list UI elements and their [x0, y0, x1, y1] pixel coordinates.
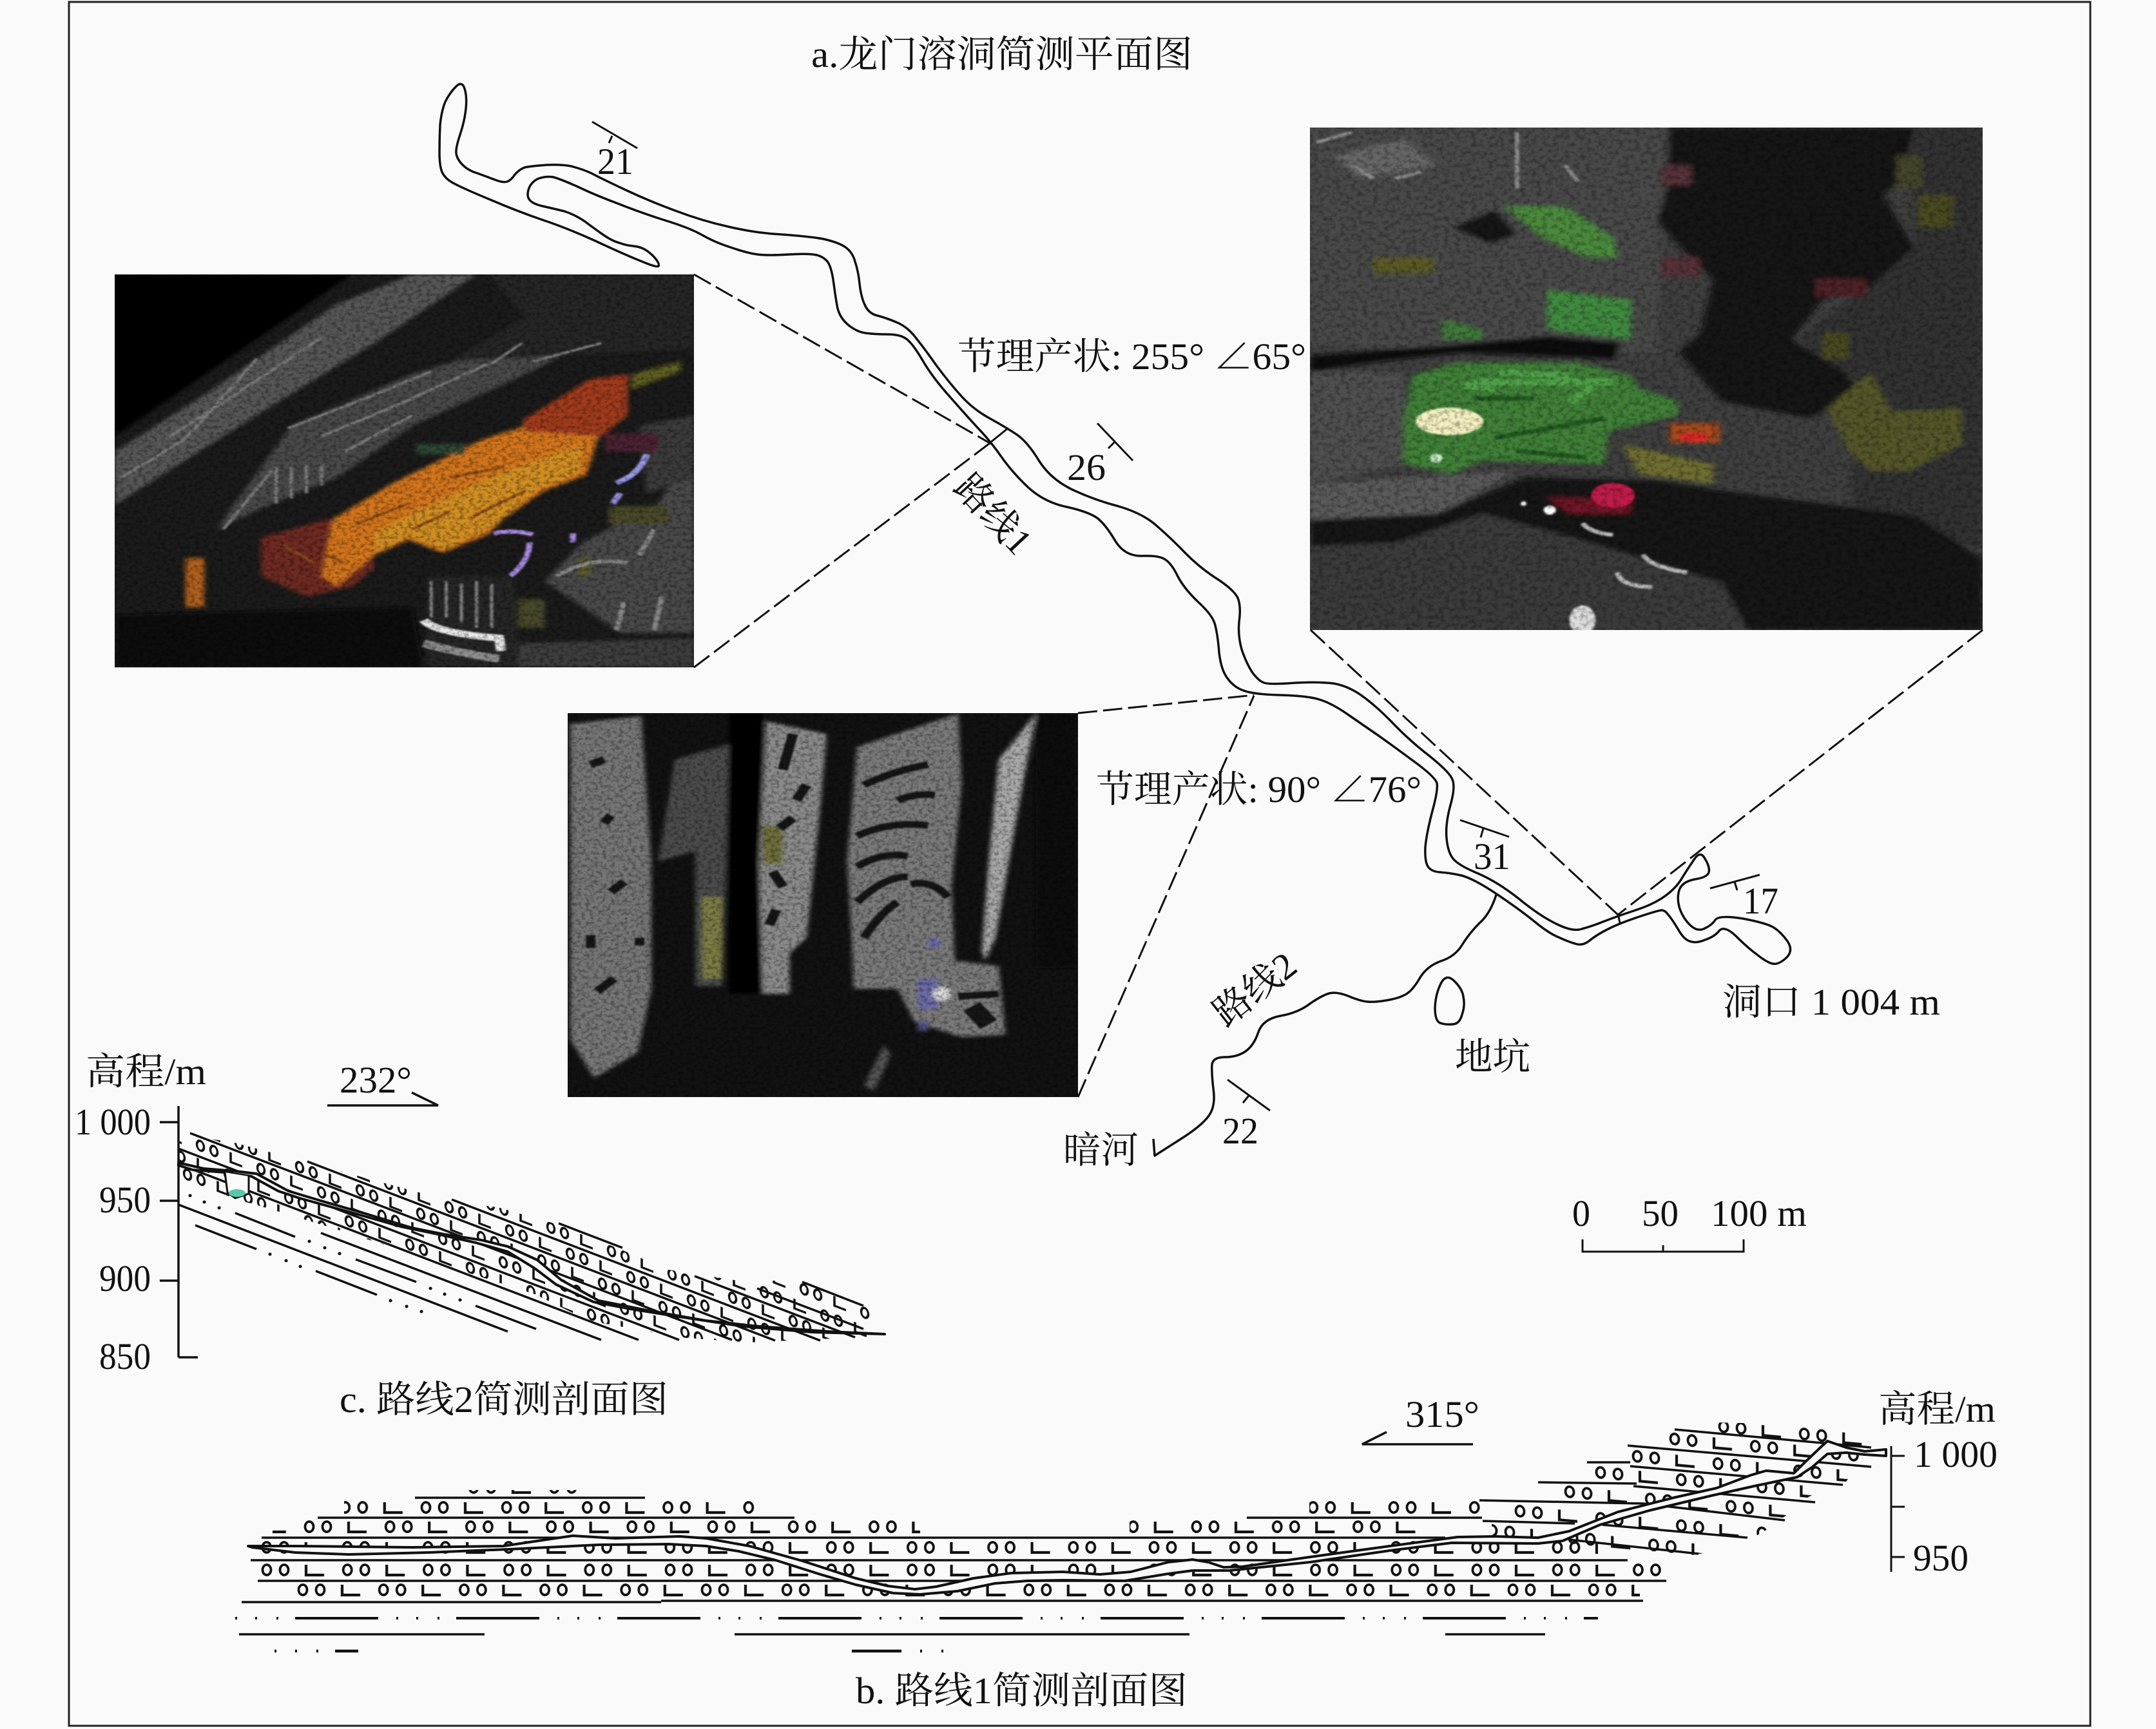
elevation axis c: 850 — [99, 1335, 151, 1377]
direction arrow 232 — [327, 1059, 438, 1105]
cave mouth label: 洞口 1 004 m — [1722, 981, 1940, 1023]
attitude symbol 26: 26 — [1067, 446, 1106, 488]
attitude symbol 17: 17 — [1743, 880, 1778, 922]
section b: route 1 profile — [235, 1388, 1997, 1712]
elevation axis c: 高程/m — [86, 1051, 206, 1093]
strata lines c — [178, 1133, 863, 1341]
callout dashes: photo 2 to section — [1078, 695, 1254, 1097]
joint attitude label 1: 节理产状: 255° ∠65° — [958, 336, 1306, 377]
section lines across cave — [991, 428, 1620, 923]
direction arrow 315 — [1362, 1393, 1479, 1444]
elevation axis c — [75, 1051, 206, 1377]
section c: route 2 profile — [77, 1053, 886, 1415]
scale bar — [1572, 1192, 1807, 1252]
attitude symbol 21: 21 — [597, 140, 633, 182]
photo: cave wall with green light — [1310, 128, 1983, 630]
lithology rows b — [261, 1490, 1675, 1600]
caption c: c. 路线2简测剖面图 — [340, 1379, 668, 1420]
cave passage b — [248, 1441, 1886, 1594]
direction arrow 315: 315° — [1405, 1393, 1479, 1435]
photo: stalactite columns — [568, 713, 1078, 1097]
photo 1 fine streaks — [121, 338, 662, 659]
attitude symbol 31 — [1460, 820, 1510, 877]
attitude symbol 26 — [1067, 423, 1133, 488]
cave plan outline — [439, 84, 1791, 964]
scale bar: 50 — [1642, 1192, 1679, 1234]
sinkhole label: 地坑 — [1455, 1036, 1530, 1078]
attitude symbol 22 — [1222, 1080, 1270, 1152]
lithology rows on slope b — [1491, 1422, 1862, 1555]
elevation axis c: 950 — [99, 1179, 151, 1221]
elevation axis c: 900 — [99, 1257, 151, 1299]
strata lines b — [239, 1429, 1871, 1634]
callout dashes: photo 3 to section — [1311, 630, 1983, 915]
direction arrow 232: 232° — [340, 1059, 412, 1101]
underground river label: 暗河 — [1063, 1129, 1139, 1171]
route 1 label: 路线1 — [946, 466, 1041, 563]
title: plan view: a.龙门溶洞简测平面图 — [811, 33, 1193, 75]
photo: cave chamber with orange light — [115, 274, 694, 667]
elevation axis b: 高程/m — [1878, 1388, 1996, 1430]
elevation axis b: 1 000 — [1914, 1433, 1997, 1475]
attitude symbol 22: 22 — [1222, 1110, 1258, 1152]
route 2 underground river — [1153, 895, 1496, 1156]
cave passage c — [178, 1163, 885, 1334]
photo 2 dark flutes — [591, 734, 999, 1024]
elevation axis c: 1 000 — [75, 1101, 151, 1143]
sandstone row b — [235, 1617, 1598, 1619]
joint attitude label 2: 节理产状: 90° ∠76° — [1096, 769, 1421, 810]
lower sandstone marks b — [274, 1650, 943, 1652]
elevation axis b: 950 — [1913, 1537, 1968, 1579]
water pit in passage — [225, 1172, 249, 1198]
lithology symbols c — [179, 1139, 870, 1342]
attitude symbol 17 — [1710, 875, 1778, 922]
sinkhole — [1435, 978, 1464, 1024]
scale bar: 0 — [1572, 1192, 1590, 1234]
route 2 label: 路线2 — [1205, 944, 1304, 1035]
attitude symbol 21 — [592, 122, 637, 182]
caption b: b. 路线1简测剖面图 — [856, 1670, 1188, 1712]
sandstone dots c — [190, 1196, 460, 1312]
photo 3 lights and details — [1316, 133, 1708, 635]
callout dashes: photo 1 to section — [694, 274, 992, 667]
elevation axis b — [1878, 1388, 1997, 1579]
scale bar: 100 m — [1711, 1192, 1807, 1234]
attitude symbol 31: 31 — [1474, 836, 1510, 877]
